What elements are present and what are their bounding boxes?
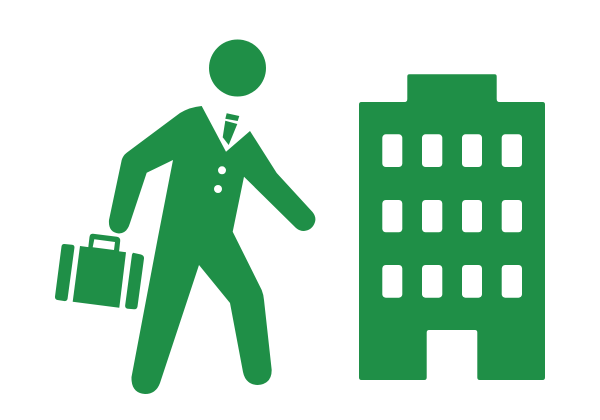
briefcase right strap <box>125 253 144 309</box>
tie knot <box>225 113 239 121</box>
tie blade <box>223 121 237 145</box>
jacket button upper <box>218 166 226 174</box>
icon: businessman <box>109 40 315 394</box>
icon: briefcase <box>55 234 144 309</box>
head <box>209 40 266 96</box>
building silhouette with door <box>359 74 545 380</box>
briefcase left strap <box>55 244 74 301</box>
briefcase body <box>73 246 126 308</box>
icon: office building <box>359 74 545 380</box>
jacket button lower <box>214 185 222 193</box>
body with suit <box>109 106 315 394</box>
windows <box>382 134 522 298</box>
briefcase handle <box>88 234 120 252</box>
